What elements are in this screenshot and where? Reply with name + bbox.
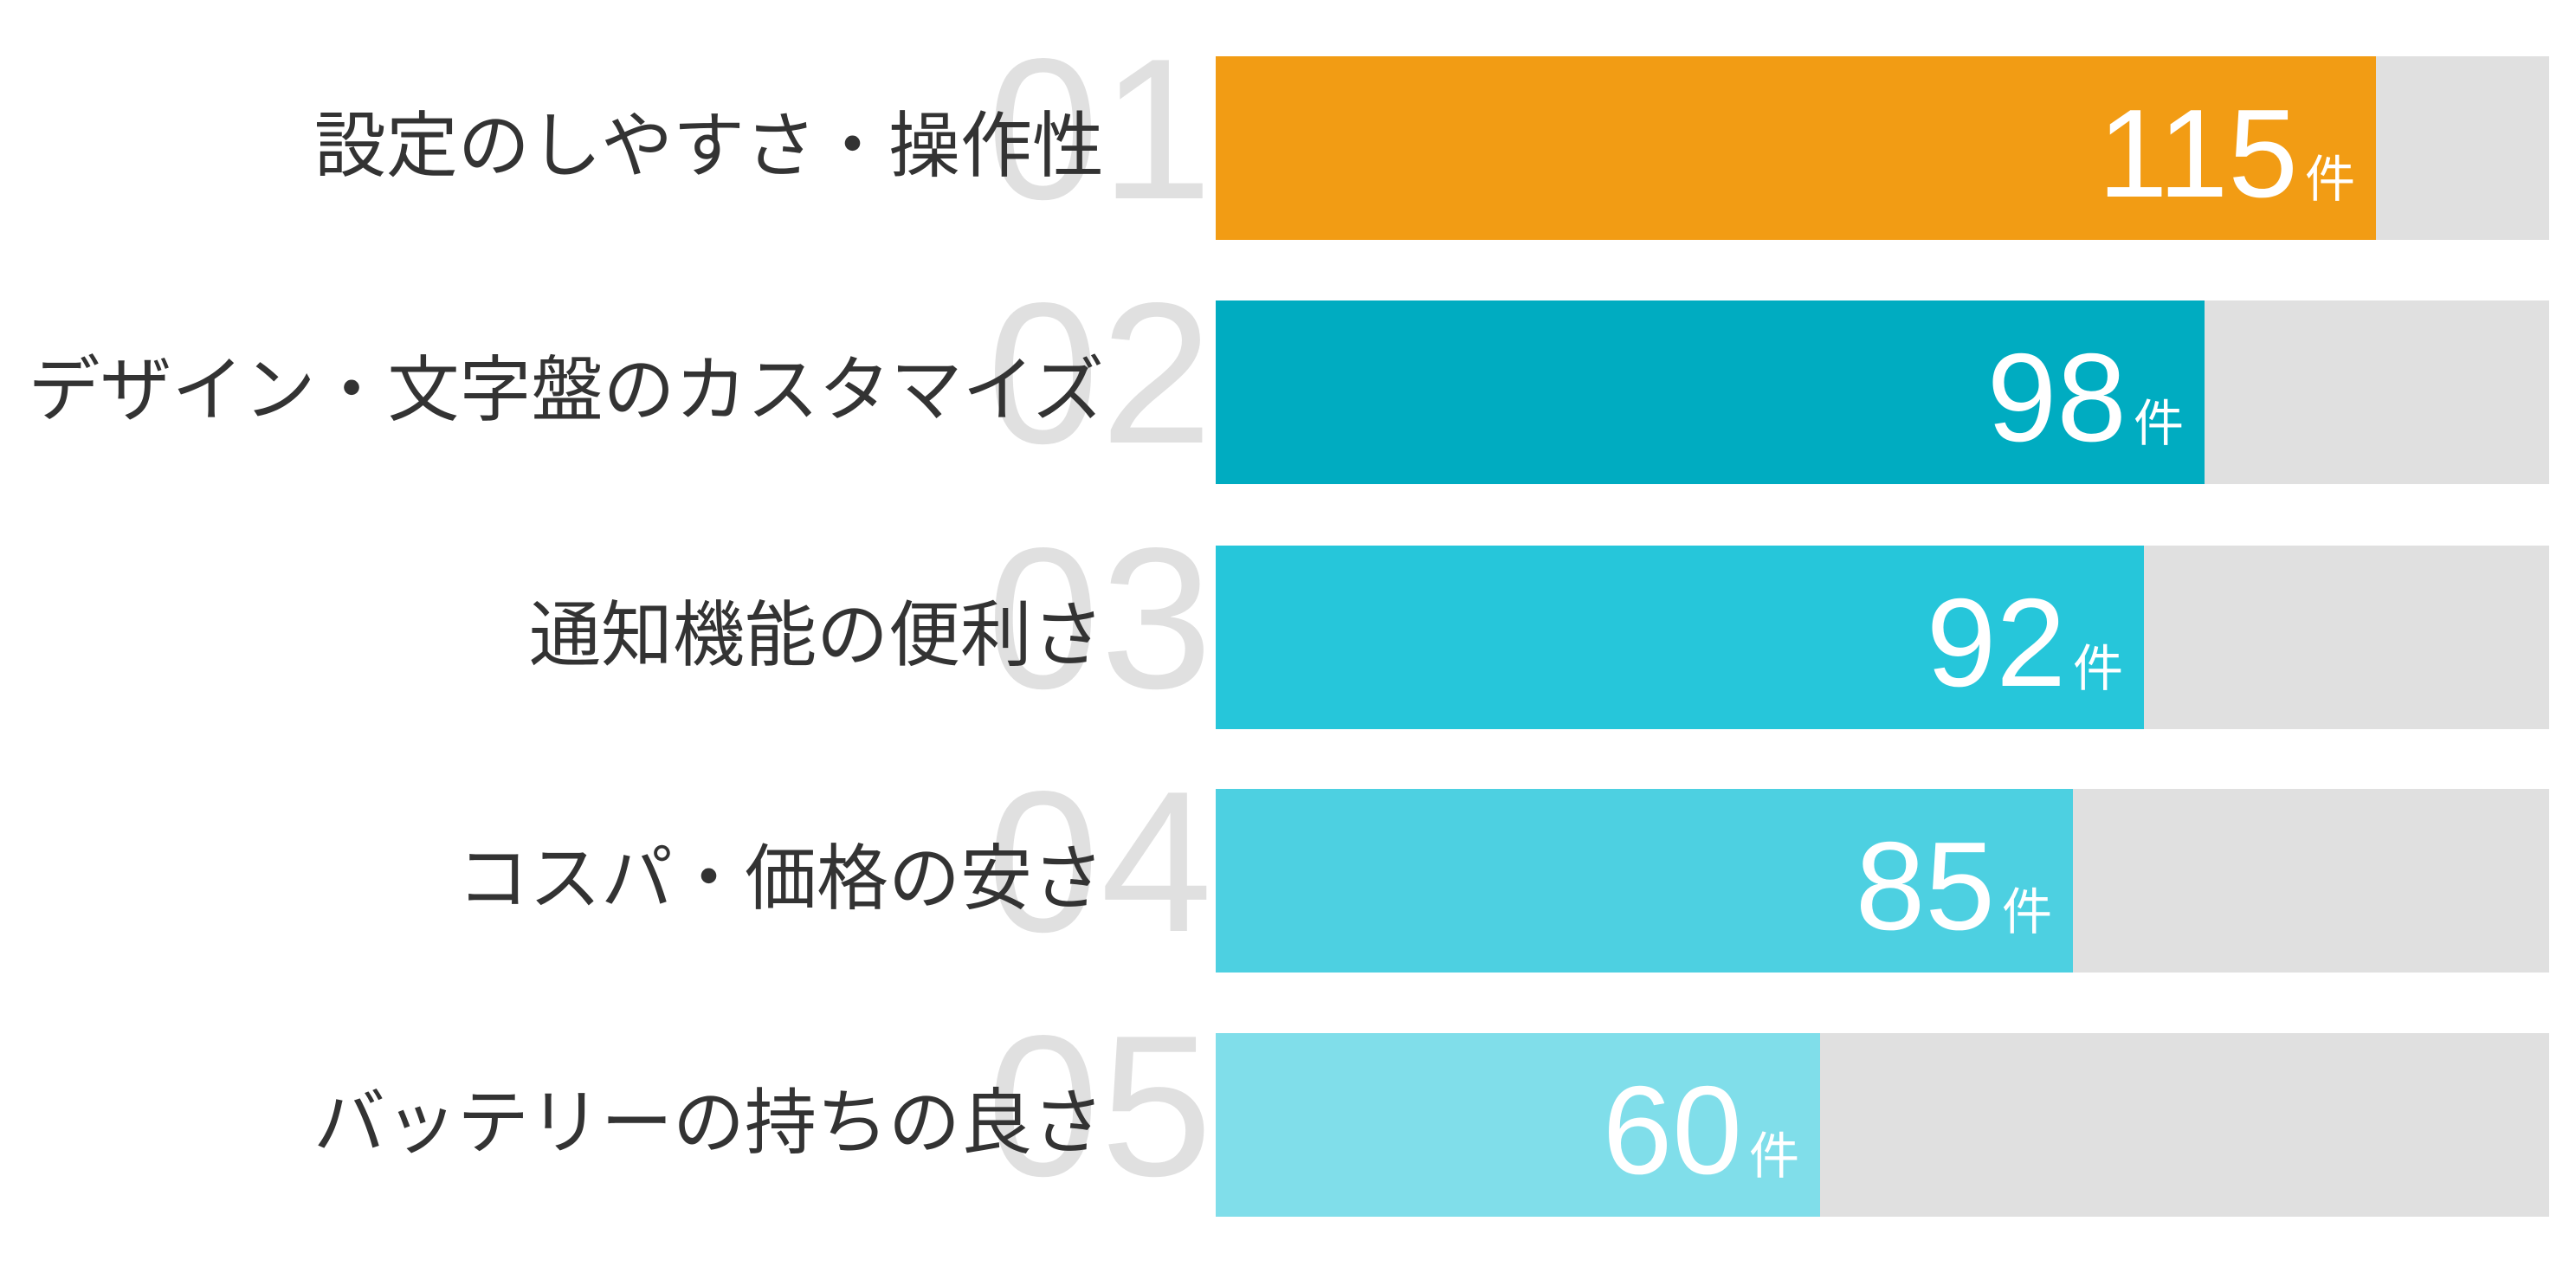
row 1 bbox=[314, 17, 2549, 242]
label 4: コスパ・価格の安さ bbox=[457, 838, 1104, 919]
rank number 01: 01 bbox=[987, 17, 1214, 242]
bar 4 bbox=[1216, 789, 2549, 973]
rank number 03: 03 bbox=[987, 507, 1214, 731]
bar 5 bbox=[1216, 1033, 2549, 1217]
row 3 bbox=[529, 507, 2549, 731]
bar 2: 98件 bbox=[1987, 327, 2184, 468]
label 5: バッテリーの持ちの良さ bbox=[313, 1082, 1104, 1163]
rank number 02: 02 bbox=[987, 262, 1214, 486]
bar 3 bbox=[1216, 546, 2549, 729]
label 3: 通知機能の便利さ bbox=[529, 595, 1104, 675]
label 1: 設定のしやすさ・操作性 bbox=[314, 106, 1104, 186]
row 2 bbox=[28, 262, 2549, 486]
bar 5: 60件 bbox=[1603, 1060, 1799, 1200]
bar 1: 115件 bbox=[2098, 83, 2355, 223]
row 4 bbox=[457, 750, 2549, 974]
label 2: デザイン・文字盤のカスタマイズ bbox=[28, 350, 1104, 430]
bar 2 bbox=[1216, 300, 2549, 484]
row 5 bbox=[313, 994, 2549, 1218]
rank number 04: 04 bbox=[987, 750, 1214, 974]
bar 3: 92件 bbox=[1927, 572, 2123, 713]
bar 1 bbox=[1216, 56, 2549, 240]
rank number 05: 05 bbox=[987, 994, 1214, 1218]
bar 4: 85件 bbox=[1856, 816, 2052, 956]
